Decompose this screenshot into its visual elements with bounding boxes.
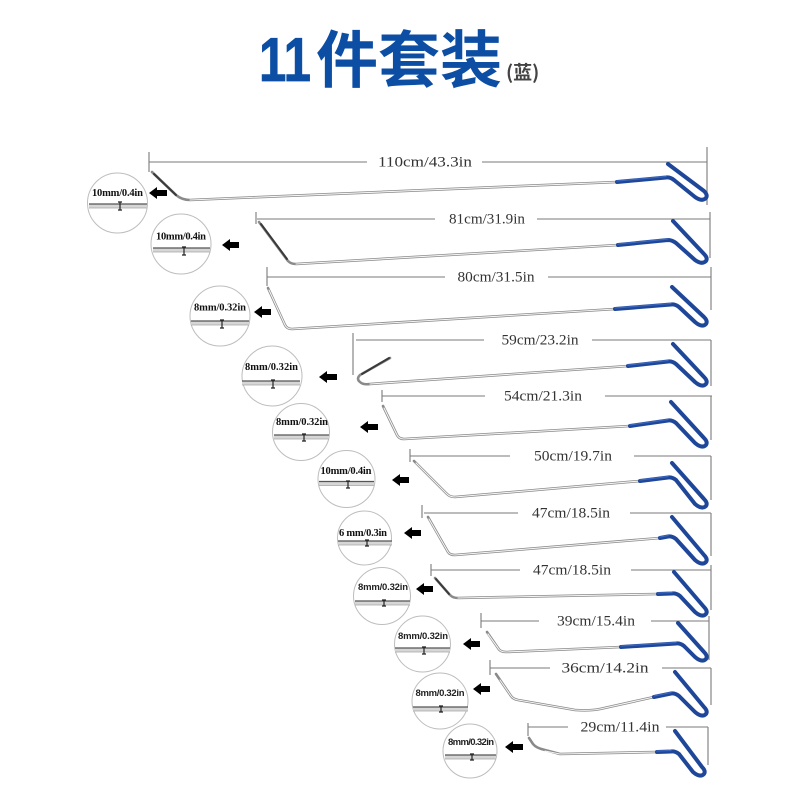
detail circle 10mm/0.4in — [318, 450, 375, 508]
rod 39cm — [487, 623, 707, 661]
tool row 3: 80cm — [190, 267, 711, 346]
dimension 47cm — [431, 562, 711, 610]
title: 件套装 — [316, 10, 502, 100]
rod 29cm — [529, 731, 705, 776]
arrow — [416, 583, 433, 595]
dimension 39cm — [481, 613, 709, 660]
rod 47cm — [428, 517, 707, 564]
dimension 110cm — [149, 147, 707, 205]
tool row 6: 50cm — [318, 448, 711, 508]
detail circle 8mm/0.32in: 8mm/0.32in — [398, 631, 448, 642]
detail circle 8mm/0.32in — [190, 286, 250, 346]
detail circle 6 mm/0.3in — [338, 511, 392, 565]
arrow — [463, 638, 480, 650]
detail circle 10mm/0.4in — [151, 214, 211, 274]
dimension 39cm: 39cm/15.4in — [557, 614, 636, 630]
rod 80cm — [268, 287, 707, 329]
title — [259, 10, 539, 100]
rod 81cm — [259, 221, 707, 264]
tool row 9: 39cm — [394, 613, 709, 672]
arrow — [360, 421, 378, 433]
dimension 36cm — [490, 660, 711, 705]
dimension 54cm — [382, 388, 712, 440]
detail circle 8mm/0.32in: 8mm/0.32in — [358, 582, 408, 593]
tool row 11: 29cm — [443, 720, 708, 778]
dimension 47cm: 47cm/18.5in — [533, 562, 612, 578]
detail circle 10mm/0.4in — [88, 173, 148, 233]
tool row 4: 59cm — [242, 332, 711, 406]
rod 50cm — [414, 461, 707, 508]
tool row 8: 47cm — [354, 562, 711, 624]
tool row 5: 54cm — [272, 388, 712, 460]
dimension 29cm: 29cm/11.4in — [580, 720, 660, 736]
dimension 59cm: 59cm/23.2in — [502, 332, 579, 348]
arrow — [505, 741, 523, 753]
dimension 50cm: 50cm/19.7in — [534, 448, 613, 464]
dimension 81cm: 81cm/31.9in — [449, 212, 525, 228]
arrow — [254, 306, 271, 318]
arrow — [473, 683, 490, 695]
title: (蓝) — [506, 58, 539, 85]
dimension 36cm: 36cm/14.2in — [562, 660, 649, 676]
arrow — [222, 239, 239, 251]
rod 59cm — [358, 344, 707, 386]
tool row 2: 81cm — [151, 212, 710, 274]
rod 110cm — [152, 164, 707, 200]
arrow — [404, 527, 421, 539]
rod 54cm — [383, 402, 707, 447]
detail circle 8mm/0.32in — [394, 616, 450, 672]
rod 36cm — [496, 672, 707, 716]
tool row 10: 36cm — [412, 660, 711, 729]
dimension 81cm — [256, 212, 710, 258]
arrow — [392, 474, 409, 486]
dimension 54cm: 54cm/21.3in — [504, 388, 583, 404]
detail circle 8mm/0.32in: 8mm/0.32in — [194, 302, 246, 314]
dimension 110cm: 110cm/43.3in — [378, 154, 473, 170]
arrow — [149, 187, 167, 199]
detail circle 8mm/0.32in: 8mm/0.32in — [276, 417, 328, 428]
dimension 47cm: 47cm/18.5in — [532, 506, 611, 522]
detail circle 6 mm/0.3in: 6 mm/0.3in — [339, 528, 387, 539]
dimension 80cm: 80cm/31.5in — [458, 270, 535, 286]
detail circle 8mm/0.32in: 8mm/0.32in — [448, 737, 494, 748]
detail circle 10mm/0.4in: 10mm/0.4in — [92, 188, 143, 199]
detail circle 10mm/0.4in: 10mm/0.4in — [156, 232, 206, 242]
dimension 47cm — [422, 505, 711, 556]
dimension 50cm — [410, 448, 711, 500]
detail circle 8mm/0.32in — [412, 673, 468, 729]
tool row 1: 110cm — [88, 147, 707, 233]
tool row 7: 47cm — [338, 505, 711, 565]
detail circle 8mm/0.32in: 8mm/0.32in — [245, 362, 298, 373]
title: 11 — [259, 26, 311, 95]
dimension 80cm — [267, 267, 711, 310]
dimension 59cm — [353, 332, 711, 386]
detail circle 8mm/0.32in — [242, 346, 302, 406]
detail circle 8mm/0.32in — [443, 724, 497, 778]
detail circle 8mm/0.32in: 8mm/0.32in — [416, 688, 465, 699]
detail circle 8mm/0.32in — [272, 404, 330, 460]
detail circle 10mm/0.4in: 10mm/0.4in — [320, 466, 372, 477]
rod 47cm — [435, 572, 707, 616]
arrow — [319, 371, 337, 383]
dimension 29cm — [528, 720, 708, 765]
detail circle 8mm/0.32in — [354, 568, 410, 624]
